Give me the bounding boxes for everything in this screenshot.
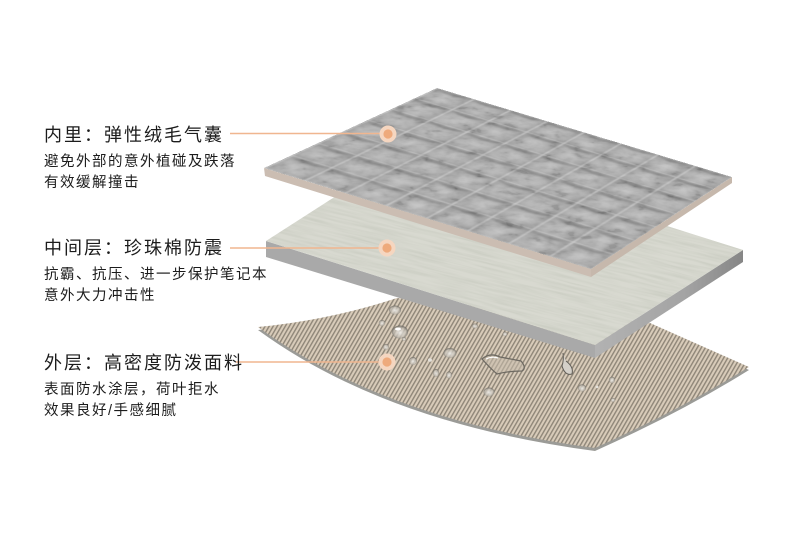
callout: outer layer: [236, 354, 396, 370]
middle foam layer: [266, 192, 743, 358]
heading: middle layer: 中间层：珍珠棉防震: [44, 238, 224, 258]
description: inner layer: 有效缓解撞击: [44, 175, 140, 191]
description: outer layer: [44, 381, 220, 419]
description: middle layer: [44, 266, 268, 304]
callout: middle layer: [230, 240, 396, 256]
description: middle layer: 意外大力冲击性: [44, 288, 156, 304]
heading: inner layer: 内里：弹性绒毛气囊: [44, 125, 224, 145]
description: inner layer: 避免外部的意外植碰及跌落: [44, 154, 236, 170]
description: inner layer: [44, 153, 236, 191]
text block: inner layer: [44, 125, 236, 191]
callout: inner layer: [230, 126, 396, 142]
description: outer layer: 表面防水涂层，荷叶拒水: [44, 382, 220, 398]
heading: outer layer: 外层：高密度防泼面料: [44, 353, 244, 373]
water droplets: [379, 306, 615, 402]
text block: outer layer: [44, 353, 244, 419]
description: middle layer: 抗霸、抗压、进一步保护笔记本: [44, 267, 268, 283]
text block: middle layer: [44, 238, 268, 304]
description: outer layer: 效果良好/手感细腻: [44, 403, 178, 419]
